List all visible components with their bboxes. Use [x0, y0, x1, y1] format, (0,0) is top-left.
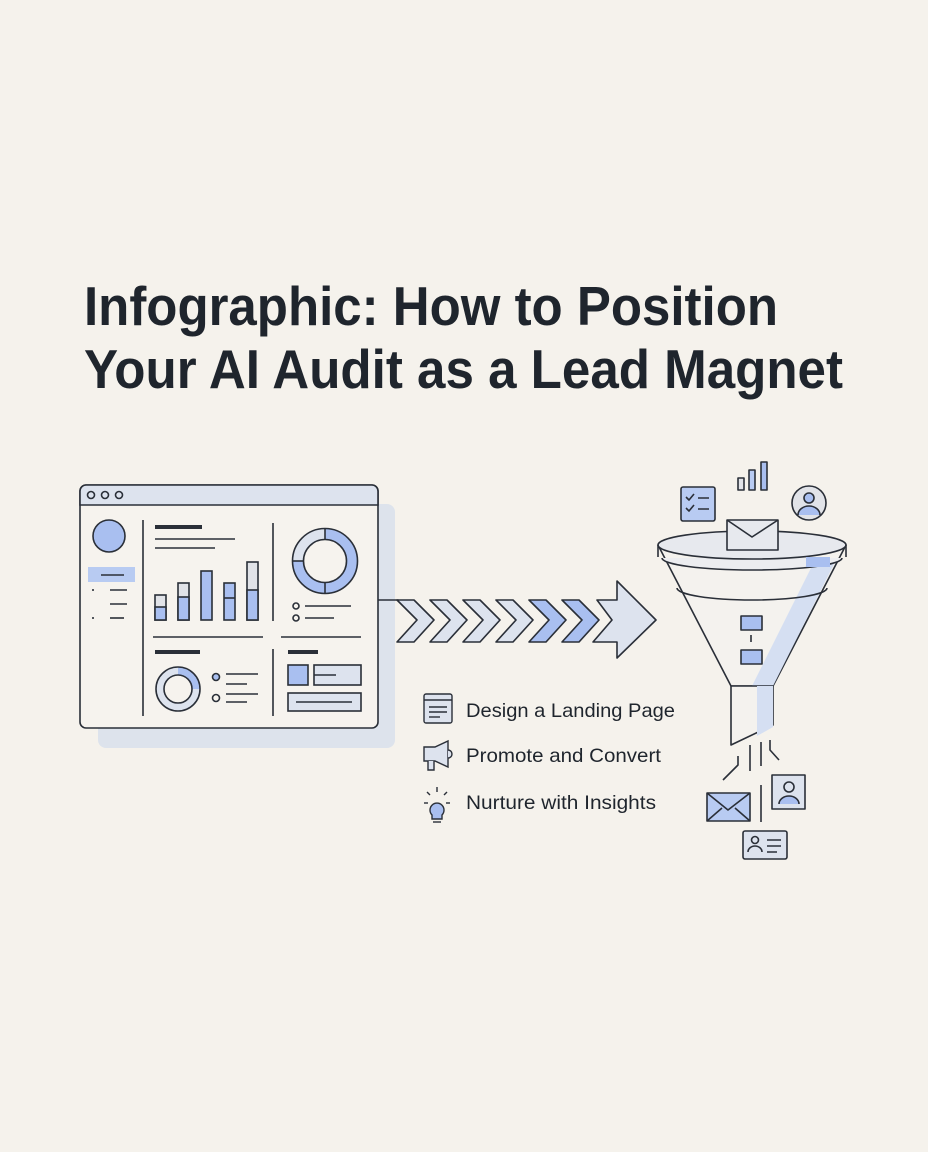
- icon: bars: [738, 462, 767, 490]
- funnel body: [658, 545, 846, 686]
- funnel: [658, 462, 846, 859]
- icon: mail on funnel: [727, 520, 778, 550]
- icon: contact card: [743, 831, 787, 859]
- arrow: chevrons: [378, 581, 656, 658]
- icon: envelope: [707, 793, 750, 821]
- icon: megaphone: [424, 741, 452, 770]
- small donut: [155, 650, 200, 654]
- bar chart: [155, 525, 202, 529]
- step list: Nurture with Insights: [466, 792, 656, 814]
- icon: landing page: [424, 694, 452, 723]
- step list: Design a Landing Page: [466, 700, 675, 722]
- step list: Promote and Convert: [466, 745, 662, 767]
- title: [84, 275, 843, 400]
- donut chart: [298, 534, 352, 588]
- layout blocks: [288, 650, 318, 654]
- icon: checklist: [681, 487, 715, 521]
- icon: lightbulb: [424, 787, 450, 822]
- sidebar: [93, 520, 125, 552]
- output lines: [723, 740, 779, 822]
- icon: profile card: [772, 775, 805, 809]
- dashboard window: [80, 485, 395, 748]
- title: Infographic: How to Position: [84, 275, 778, 337]
- step list: [424, 694, 675, 822]
- title: Your AI Audit as a Lead Magnet: [84, 338, 843, 400]
- icon: user: [792, 486, 826, 520]
